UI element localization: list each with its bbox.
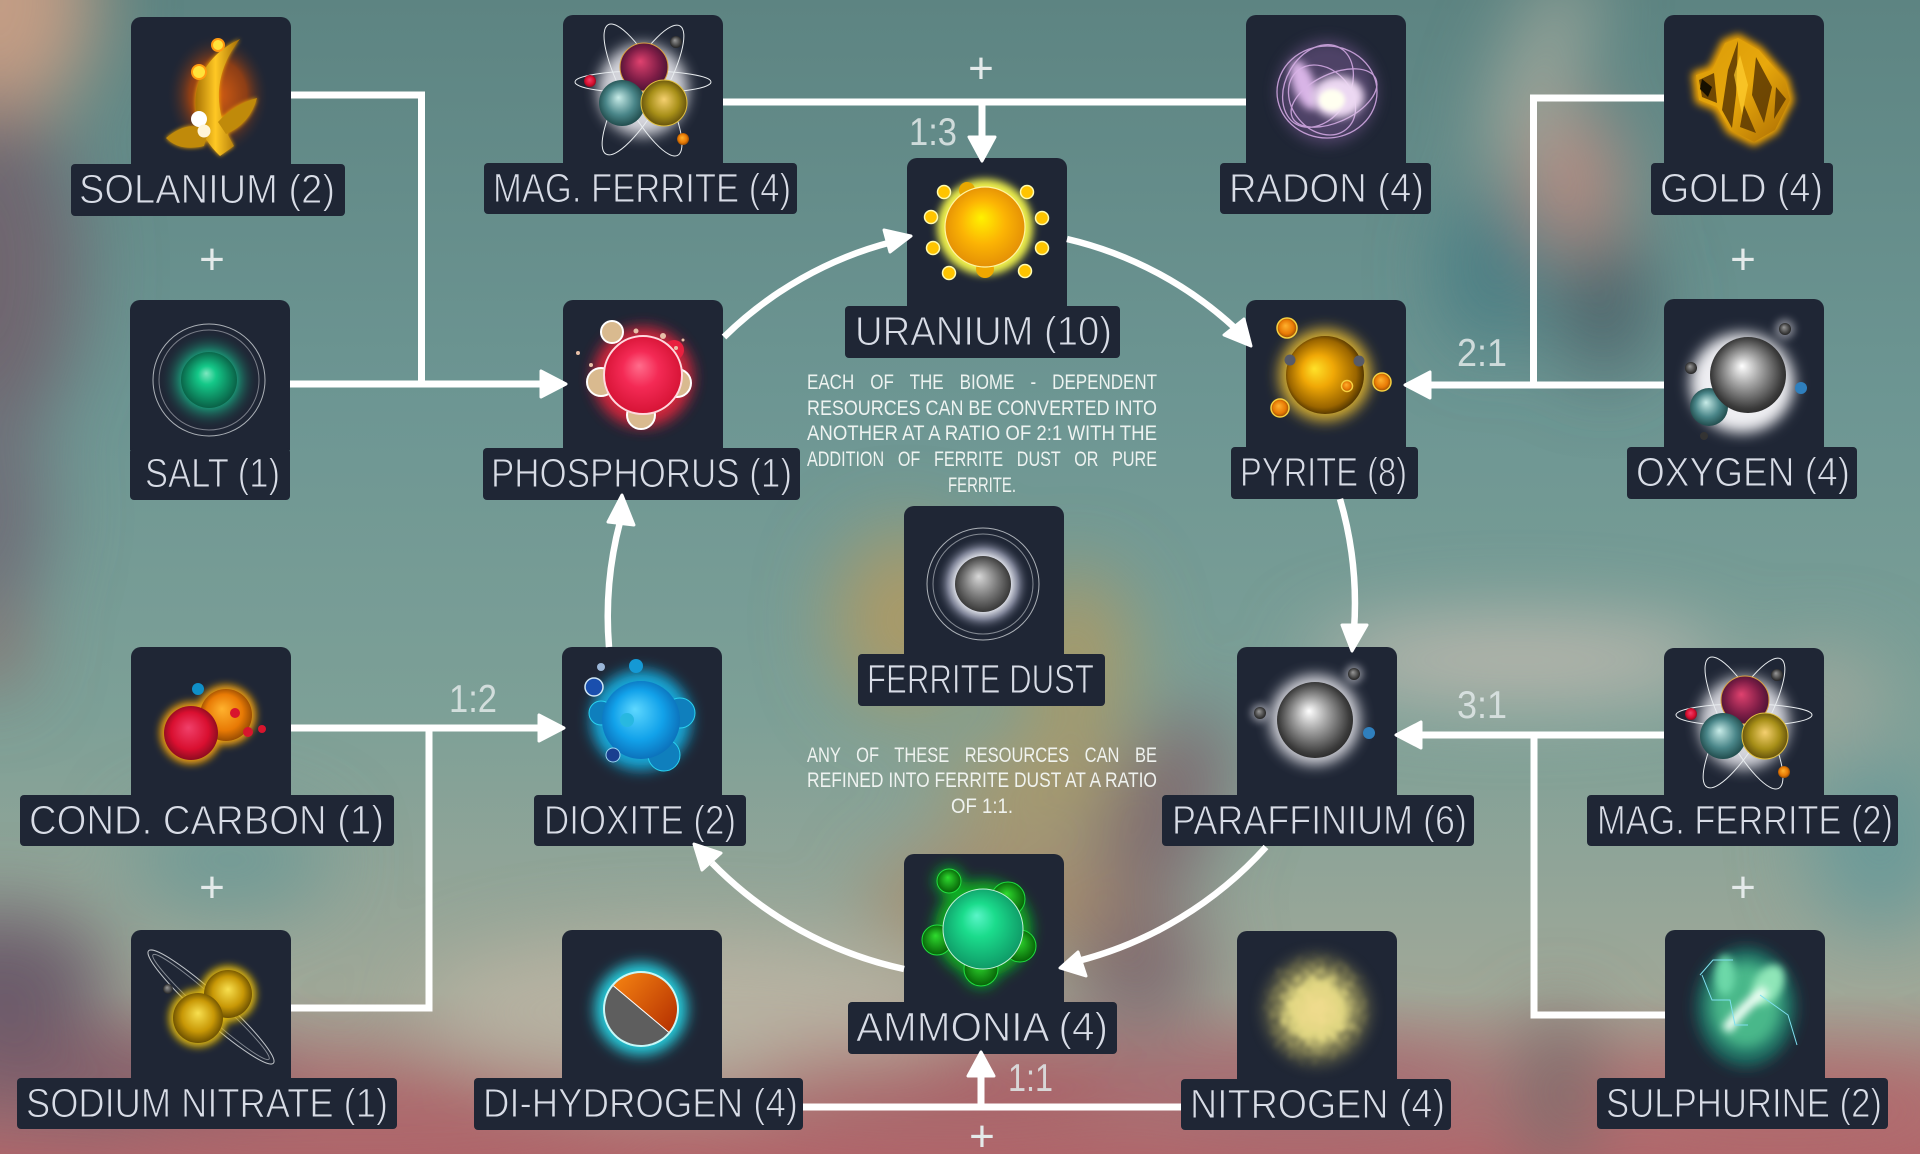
- label: condensed carbon: COND. CARBON (1): [29, 797, 384, 843]
- text block: refining note: [807, 744, 1157, 818]
- ratio 1:2: 1:2: [449, 678, 497, 721]
- connector: solanium and salt to phosphorus: [290, 95, 566, 397]
- text block: refining note: ANY OF THESE RESOURCES CAN BE: [807, 744, 1157, 767]
- icon: condensed carbon: [160, 683, 266, 764]
- label: dioxite: DIOXITE (2): [544, 797, 736, 843]
- card: sulphurine: [1597, 930, 1888, 1129]
- card: gold: [1651, 15, 1833, 215]
- card: sodium nitrate: [17, 930, 397, 1129]
- ratio 3:1: 3:1: [1457, 684, 1507, 727]
- card: magnetised ferrite top: [484, 15, 797, 214]
- card: di-hydrogen: [474, 930, 803, 1130]
- label: phosphorus: PHOSPHORUS (1): [491, 450, 792, 496]
- text block: conversion note: EACH OF THE BIOME - DEPENDENT: [807, 371, 1157, 394]
- label: paraffinium: PARAFFINIUM (6): [1172, 797, 1467, 843]
- plus: upper right: +: [1730, 235, 1756, 284]
- plus: top centre: +: [968, 44, 994, 93]
- label: di-hydrogen: DI-HYDROGEN (4): [483, 1080, 798, 1126]
- text block: conversion note: ANOTHER AT A RATIO OF 2:1 WITH THE: [807, 422, 1157, 445]
- ratio 1:3: 1:3: [909, 111, 957, 154]
- card: ammonia: [848, 854, 1117, 1054]
- plus: upper left: +: [199, 235, 225, 284]
- card: ferrite dust: [858, 506, 1105, 706]
- plus: lower right: +: [1730, 863, 1756, 912]
- icon: sodium nitrate: [140, 941, 282, 1073]
- card: condensed carbon: [20, 647, 394, 846]
- ratio 2:1: 2:1: [1457, 332, 1507, 375]
- card: magnetised ferrite lower: [1587, 648, 1898, 846]
- icon: ferrite dust: [927, 528, 1039, 640]
- icon: solanium: [166, 33, 270, 157]
- label: pyrite: PYRITE (8): [1240, 449, 1407, 495]
- label: solanium: SOLANIUM (2): [79, 166, 335, 212]
- icon: magnetised ferrite: [575, 15, 711, 165]
- icon: radon: [1268, 32, 1386, 148]
- arrow: pyrite to paraffinium: [1340, 499, 1367, 651]
- text block: conversion note: FERRITE.: [948, 474, 1016, 497]
- card: solanium: [71, 17, 345, 216]
- text block: conversion note: RESOURCES CAN BE CONVERTED INTO: [807, 397, 1157, 420]
- connector: di-hydrogen and nitrogen to ammonia: [803, 1052, 1181, 1107]
- text block: refining note: OF 1:1.: [951, 795, 1013, 818]
- card: paraffinium: [1162, 647, 1474, 846]
- card: dioxite: [534, 647, 746, 846]
- arrow: phosphorus to uranium: [724, 230, 911, 337]
- card: pyrite: [1231, 300, 1418, 499]
- card: uranium: [845, 158, 1120, 358]
- icon: ammonia: [922, 867, 1036, 987]
- plus: lower left: +: [199, 863, 225, 912]
- card: salt: [130, 300, 290, 500]
- icon: paraffinium: [1251, 665, 1375, 765]
- label: uranium: URANIUM (10): [855, 308, 1112, 354]
- arrow: ammonia to dioxite: [694, 844, 904, 969]
- icon: salt: [153, 324, 265, 436]
- card: nitrogen: [1181, 931, 1451, 1130]
- arrow: paraffinium to ammonia: [1060, 847, 1266, 976]
- icon: phosphorus: [576, 321, 693, 429]
- connector: gold and oxygen to pyrite: [1405, 98, 1664, 398]
- connector: condensed carbon and sodium nitrate to dioxite: [291, 715, 564, 1008]
- icon: uranium: [924, 179, 1048, 280]
- label: radon: RADON (4): [1229, 165, 1424, 211]
- icon: di-hydrogen: [590, 958, 692, 1060]
- text block: conversion note: ADDITION OF FERRITE DUST OR PURE: [807, 448, 1157, 471]
- card: phosphorus: [483, 300, 800, 500]
- connector: magnetised ferrite and radon to uranium: [723, 102, 1246, 161]
- label: salt: SALT (1): [145, 450, 280, 496]
- label: nitrogen: NITROGEN (4): [1190, 1081, 1445, 1127]
- label: oxygen: OXYGEN (4): [1636, 449, 1850, 495]
- card: radon: [1220, 15, 1431, 214]
- icon: dioxite: [585, 659, 695, 771]
- label: sodium nitrate: SODIUM NITRATE (1): [26, 1080, 388, 1126]
- arrow: dioxite to phosphorus: [608, 495, 634, 647]
- icon: nitrogen: [1263, 954, 1371, 1066]
- label: ammonia: AMMONIA (4): [856, 1004, 1108, 1050]
- text block: conversion note: [807, 371, 1157, 497]
- ratio 1:1: 1:1: [1008, 1057, 1053, 1100]
- arrow: uranium to pyrite: [1067, 239, 1251, 346]
- icon: oxygen: [1685, 319, 1807, 440]
- icon: gold nugget: [1696, 38, 1790, 142]
- label: gold: GOLD (4): [1660, 165, 1823, 211]
- label: ferrite dust: FERRITE DUST: [867, 656, 1094, 702]
- card: oxygen: [1627, 299, 1857, 499]
- icon: sulphurine: [1696, 947, 1797, 1067]
- connector: magnetised ferrite and sulphurine to paraffinium: [1396, 722, 1665, 1015]
- label: magnetised ferrite: MAG. FERRITE (4): [493, 165, 791, 211]
- icon: pyrite: [1271, 318, 1391, 421]
- icon: magnetised ferrite: [1676, 648, 1812, 798]
- text block: refining note: REFINED INTO FERRITE DUST AT A RATIO: [807, 769, 1157, 792]
